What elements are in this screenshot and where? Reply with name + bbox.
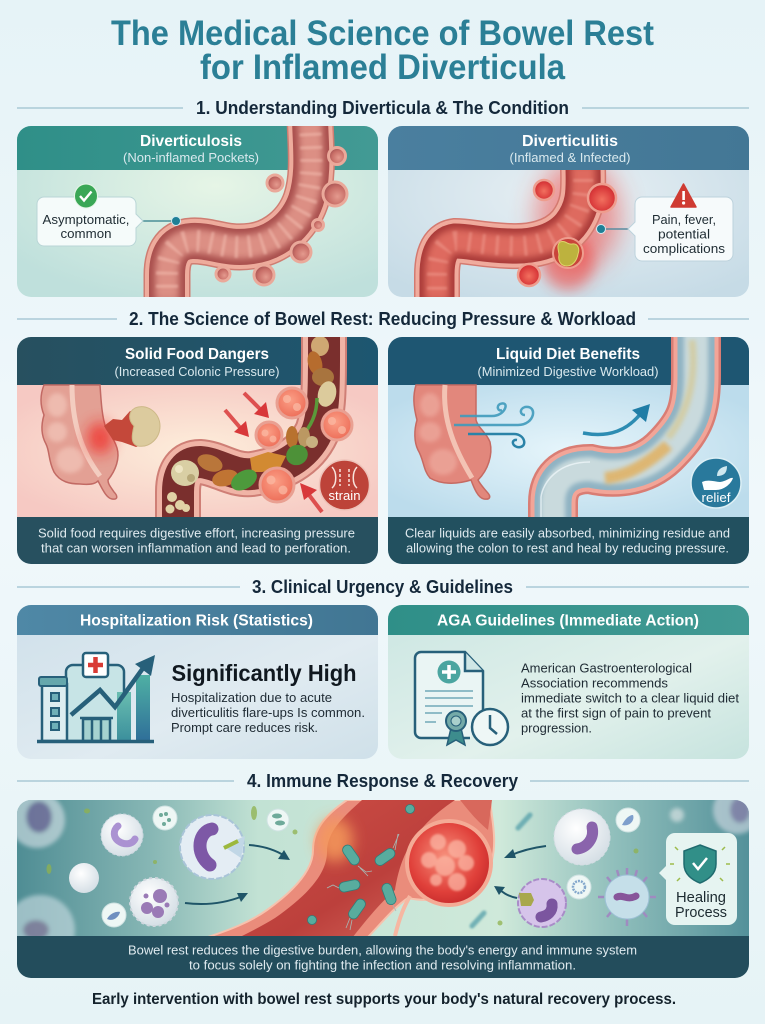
header text: [123, 133, 259, 165]
title: The Medical Science of Bowel Rest: [111, 14, 654, 53]
text block: progression.: [521, 720, 592, 736]
header text: Diverticulitis: [522, 133, 618, 150]
header text: (Non-inflamed Pockets): [123, 150, 259, 165]
panel: AGA guidelines: [388, 605, 749, 759]
icon: shield: [670, 845, 730, 883]
callout: healing process: Process: [675, 904, 727, 921]
diverticular pockets: [216, 148, 347, 285]
header text: [510, 133, 630, 165]
title: [111, 14, 654, 87]
caption: [405, 526, 730, 556]
illustration: inflamed colon and bacteria: [17, 800, 749, 936]
header text: AGA Guidelines (Immediate Action): [437, 612, 699, 630]
text block: Prompt care reduces risk.: [171, 720, 318, 735]
text block: at the first sign of pain to prevent: [521, 706, 711, 720]
title: for Inflamed Diverticula: [200, 48, 565, 87]
icon: warning: [671, 184, 696, 207]
callout: healing process: [659, 833, 737, 925]
heading: section 1: 1. Understanding Diverticula & The Condition: [196, 98, 569, 118]
heading: section 3: 3. Clinical Urgency & Guidelines: [252, 577, 513, 597]
text block: immediate switch to a clear liquid diet: [521, 690, 739, 706]
bacteria flagella: [327, 834, 399, 930]
faded background cells: [17, 800, 749, 936]
arrows: immune cells toward infection: [185, 845, 546, 904]
callout: asymptomatic: common: [60, 226, 112, 241]
badge: relief: relief: [702, 490, 731, 505]
callout: pain, fever: Pain, fever,: [652, 212, 716, 227]
illustration: colon with solid food: [166, 330, 352, 525]
illustration: resting colon segment: [414, 385, 491, 499]
callout: healing process: Healing: [676, 889, 726, 906]
panel: solid food dangers: [17, 330, 378, 564]
white blood cells: [69, 809, 656, 927]
callout: asymptomatic: Asymptomatic,: [42, 212, 130, 227]
illustration: healthy colon with pockets: [167, 120, 347, 300]
panel: liquid diet benefits: [388, 330, 749, 564]
food pieces: [166, 336, 339, 514]
heading: section 4: 4. Immune Response & Recovery: [247, 771, 518, 791]
specks: [46, 806, 638, 926]
footer statement: Early intervention with bowel rest supports your body's natural recovery process.: [92, 991, 676, 1008]
caption: allowing the colon to rest and heal by reducing pressure.: [406, 540, 729, 556]
callout: asymptomatic: [37, 184, 180, 246]
arrow: flow: [583, 404, 650, 434]
header text: Liquid Diet Benefits: [496, 346, 640, 363]
panel: hospitalization risk: [17, 605, 378, 759]
heading: section 2: 2. The Science of Bowel Rest: Reducing Pressure & Workload: [129, 309, 636, 329]
icon: document, ribbon and clock: [415, 652, 508, 745]
header text: Solid Food Dangers: [125, 346, 269, 363]
caption: to focus solely on fighting the infection and resolving inflammation.: [189, 958, 576, 972]
arrows: pressure: [225, 393, 322, 512]
header text: Hospitalization Risk (Statistics): [80, 612, 313, 630]
illustration: colon with clear liquid: [541, 330, 696, 525]
text block: [521, 660, 739, 736]
icon: hospital with rising chart: [37, 653, 155, 742]
caption: Bowel rest reduces the digestive burden, allowing the body's energy and immune system: [128, 942, 637, 958]
caption: Solid food requires digestive effort, increasing pressure: [38, 526, 355, 540]
callout: pain, fever: potential: [658, 226, 710, 242]
inflamed pockets: [256, 388, 352, 502]
bacteria: [308, 804, 414, 924]
badge: relief: [691, 458, 741, 508]
header text: (Inflamed & Infected): [510, 150, 630, 165]
header text: (Increased Colonic Pressure): [114, 364, 280, 379]
icon: wind swirls: [454, 403, 533, 447]
caption: [38, 526, 355, 556]
header text: Diverticulosis: [140, 133, 242, 150]
text block: Association recommends: [521, 676, 668, 690]
panel: immune response: [17, 800, 749, 978]
stat: significantly high: Significantly High: [172, 660, 356, 686]
icon: check: [74, 184, 98, 208]
caption: [128, 942, 637, 972]
panel: diverticulosis: [17, 120, 378, 300]
caption: that can worsen inflammation and lead to perforation.: [41, 540, 351, 556]
text block: [171, 690, 365, 735]
text block: diverticulitis flare-ups Is common.: [171, 705, 365, 720]
callout: pain, fever: complications: [643, 241, 726, 256]
text block: Hospitalization due to acute: [171, 690, 332, 705]
badge: strain: strain: [328, 488, 360, 503]
panel: diverticulitis: [388, 126, 749, 300]
header text: [478, 346, 658, 379]
badge: strain: [320, 460, 370, 510]
illustration: perforated colon segment: [41, 385, 160, 499]
illustration: inflamed colon: [437, 160, 620, 300]
abscess: [407, 821, 491, 905]
header text: (Minimized Digestive Workload): [478, 364, 658, 379]
header text: [114, 346, 280, 379]
text block: American Gastroenterological: [521, 660, 692, 676]
caption: Clear liquids are easily absorbed, minimizing residue and: [405, 526, 730, 540]
speech bubbles: [102, 806, 640, 927]
callout: pain, fever: [596, 184, 733, 261]
pus pocket: [553, 238, 583, 268]
